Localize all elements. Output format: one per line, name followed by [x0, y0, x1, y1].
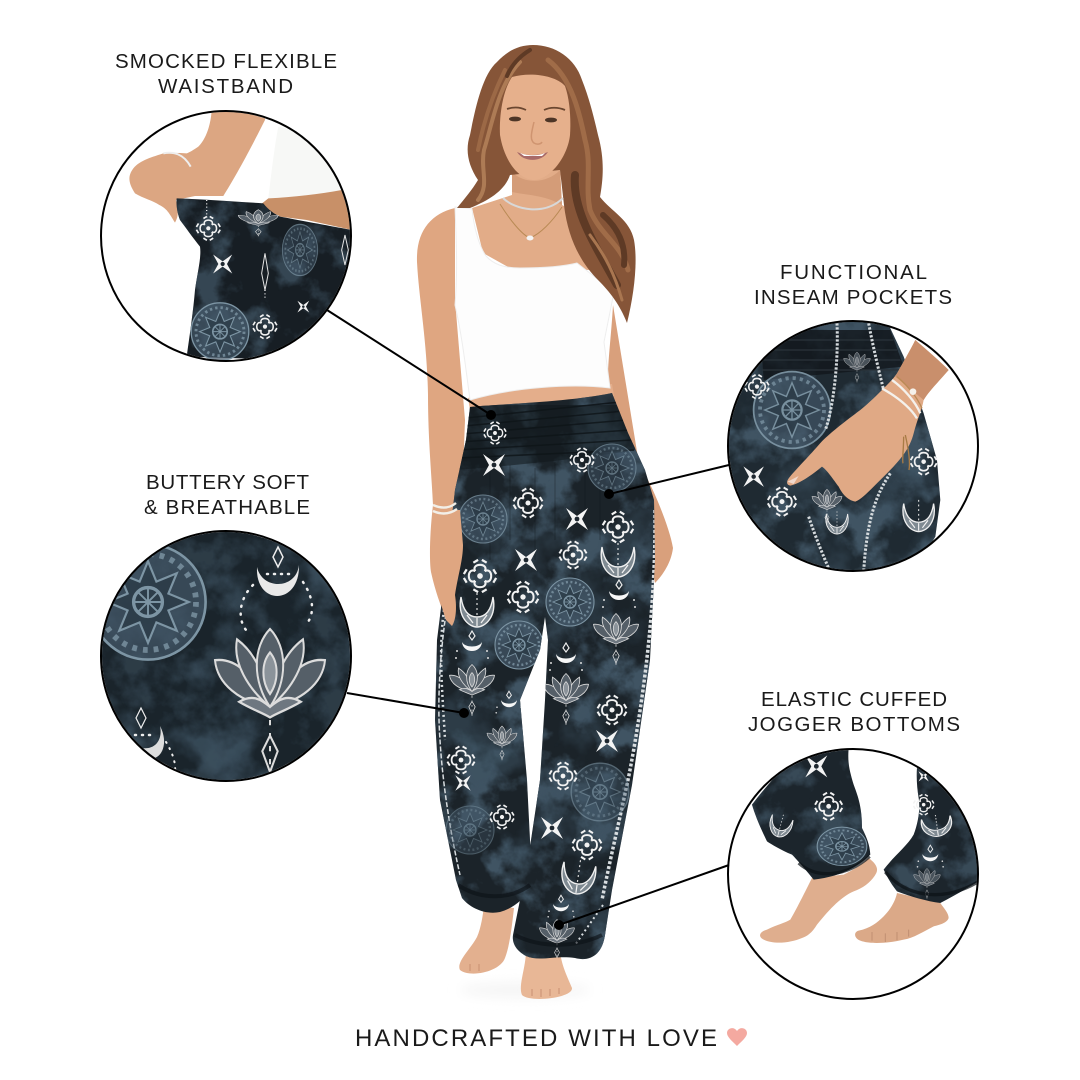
- neck shadow: [512, 170, 562, 205]
- model figure: [417, 45, 673, 999]
- footer tagline: HANDCRAFTED WITH LOVE: [355, 1025, 717, 1052]
- hair strands: [478, 50, 628, 300]
- heading: ELASTIC CUFFED: [761, 688, 947, 711]
- pointer: cuffs: [554, 865, 729, 930]
- white crop top: [455, 207, 614, 400]
- heading: JOGGER BOTTOMS: [748, 713, 960, 736]
- detail circle: [100, 110, 355, 365]
- crescent: [257, 565, 299, 596]
- pants pattern: lotus flowers: [450, 614, 638, 959]
- right foot: [521, 950, 572, 999]
- pants pattern: mandalas: [446, 444, 636, 854]
- heading: [748, 688, 960, 736]
- necklaces: [500, 198, 563, 240]
- smocked waistband: [458, 402, 634, 560]
- waistband darkening: [455, 405, 635, 470]
- pointer lines and dots: [327, 310, 729, 930]
- left foot: [459, 905, 514, 974]
- pointer: pockets: [604, 465, 729, 499]
- icon: heart: [727, 1028, 747, 1046]
- right arm and hand: [608, 305, 673, 583]
- heading: [144, 471, 310, 519]
- detail circle: [727, 320, 979, 572]
- fingers over pants: [431, 510, 463, 626]
- pants pattern: stars: [455, 454, 618, 839]
- detail circle: [727, 748, 979, 1000]
- heading: WAISTBAND: [158, 75, 293, 98]
- detail circle: [90, 530, 352, 782]
- left arm and hand: [417, 208, 465, 626]
- neck and chest skin: [472, 165, 600, 270]
- heading: [754, 261, 952, 309]
- pointer: fabric: [347, 693, 469, 718]
- heading: FUNCTIONAL: [780, 261, 927, 284]
- midriff skin: [468, 380, 614, 410]
- eyes, brows and smile: [507, 108, 565, 160]
- harem pants: [435, 393, 655, 960]
- heading: INSEAM POCKETS: [754, 286, 952, 309]
- face: [500, 75, 570, 180]
- feature: smocked waistband: [100, 50, 355, 365]
- cuff gathers: [458, 885, 602, 945]
- left bracelets: [433, 503, 457, 513]
- heading: [115, 50, 337, 98]
- heading: & BREATHABLE: [144, 496, 310, 519]
- pants pattern: crescents: [455, 543, 636, 918]
- feature: elastic cuffed bottoms: [727, 688, 979, 1000]
- lower crescent: [142, 726, 164, 759]
- heading: SMOCKED FLEXIBLE: [115, 50, 337, 73]
- feature: inseam pockets: [727, 261, 979, 572]
- feature: buttery soft fabric: [90, 471, 352, 782]
- side trim: [438, 510, 655, 944]
- pants pattern: flowers: [447, 422, 633, 859]
- lotus: [215, 629, 325, 777]
- floor shadow: [460, 983, 590, 997]
- pointer: waistband: [327, 310, 496, 420]
- heading: BUTTERY SOFT: [146, 471, 309, 494]
- hair: [457, 45, 636, 323]
- mandala: [103, 546, 207, 661]
- toes: [470, 964, 559, 997]
